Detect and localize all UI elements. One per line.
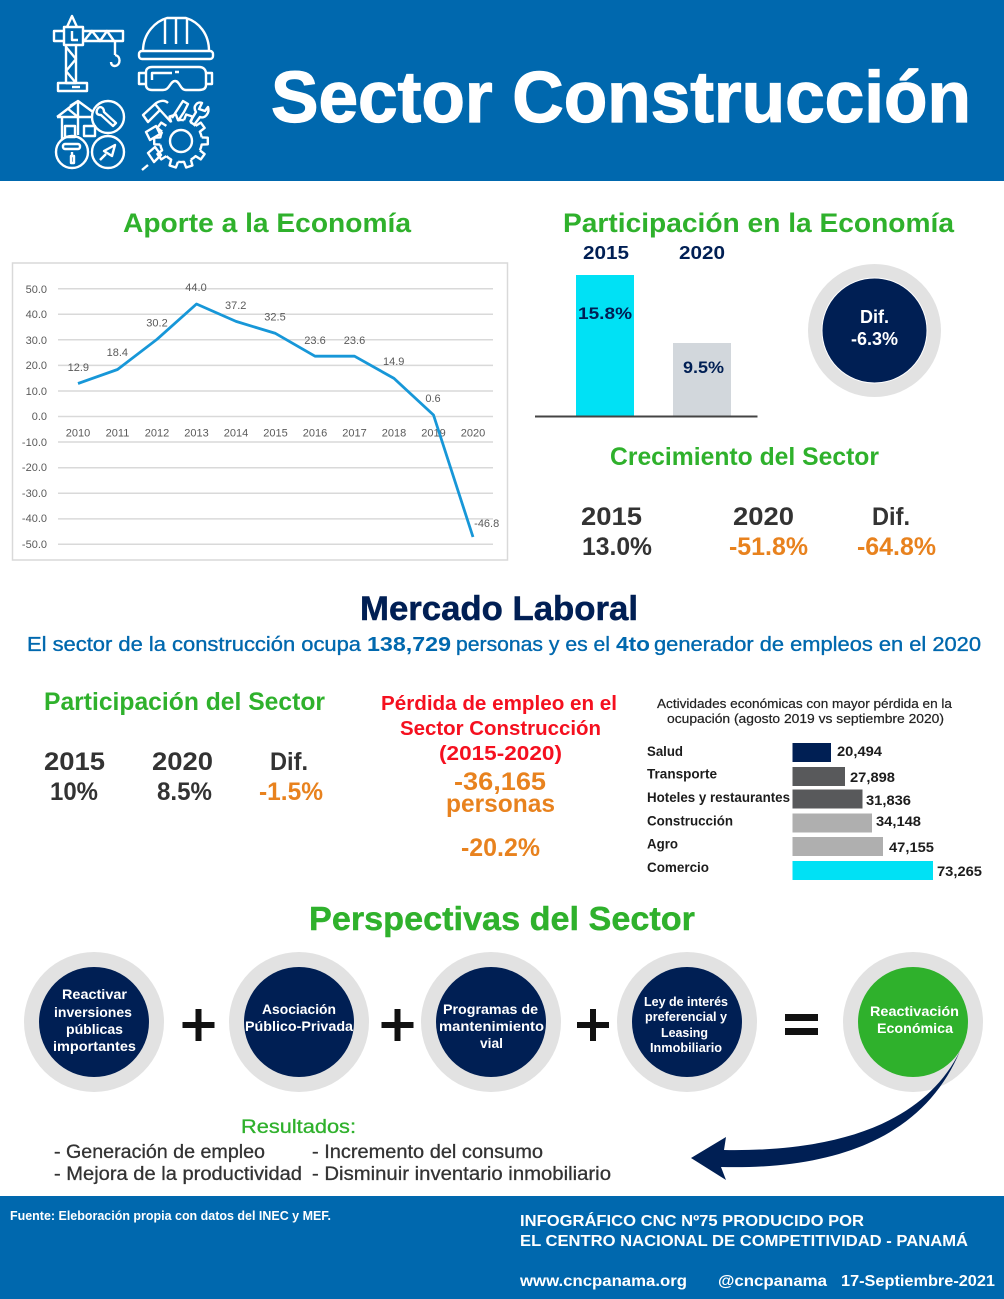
data labels: 37.2 [225,300,246,312]
panel: participación del sector: 10% [50,778,98,806]
bar chart: actividades económicas: 73,265 [937,864,983,879]
heading: perspectivas del sector: Perspectivas del Sector [309,900,695,937]
data labels: 12.9 [68,362,89,374]
data line [78,304,473,537]
results block: - Mejora de la productividad [54,1164,302,1185]
plus sign [577,1009,609,1041]
panel: participación del sector: Dif. [270,748,308,776]
subtitle: empleo [27,634,981,656]
gridlines and y axis: 10.0 [26,386,47,398]
circle: reactivar inversiones: importantes [53,1038,136,1054]
bar chart: actividades económicas: ocupación (agosto 2019 vs septiembre 2020) [667,712,944,726]
gridlines and y axis: 40.0 [26,309,47,321]
bar chart: actividades económicas: 47,155 [889,840,935,855]
panel: participación del sector: -1.5% [259,778,323,806]
panel: participación del sector: 8.5% [157,778,212,806]
bar chart: actividades económicas: Salud [647,744,683,759]
data labels [68,282,499,530]
year labels: 2016 [303,428,327,440]
panel: participación del sector [44,688,325,806]
results block [54,1117,611,1185]
year labels [66,428,485,440]
gridlines and y axis: 30.0 [26,335,47,347]
circle: ley de interés: preferencial y [645,1010,727,1024]
bar chart: actividades económicas: Construcción [647,814,733,828]
subtitle: empleo: El sector de la construcción ocupa [27,634,362,656]
panel: pérdida de empleo [381,693,617,862]
gridlines and y axis: 0.0 [32,411,47,423]
panel: pérdida de empleo: Sector Construcción [400,718,601,740]
circle: reactivar inversiones [24,952,164,1092]
footer: Fuente: Eleboración propia con datos del INEC y MEF. [10,1208,331,1223]
equals sign [785,1014,818,1035]
year labels: 2018 [382,428,406,440]
panel: participación del sector: 2020 [152,748,213,776]
bar chart: participación: 9.5% [683,358,724,377]
gridlines and y axis [22,284,493,551]
circle: programas de mantenimiento: vial [480,1035,503,1051]
subtitle: empleo: 4to [616,634,650,656]
icon: helmet and goggles [139,18,213,90]
footer: EL CENTRO NACIONAL DE COMPETITIVIDAD - PANAMÁ [520,1231,968,1250]
circle: reactivar inversiones: inversiones [54,1004,132,1020]
data labels: 18.4 [107,347,128,359]
circle: programas de mantenimiento: Programas de [443,1001,538,1017]
data labels: 30.2 [146,318,168,330]
year labels: 2011 [106,428,129,440]
heading: mercado laboral: Mercado Laboral [360,590,638,628]
footer: www.cncpanama.org [519,1273,687,1290]
bar chart: participación: 2015 [583,243,629,263]
callout: diferencia: Dif. [860,307,889,327]
year labels: 2014 [224,428,248,440]
stats: crecimiento: 13.0% [582,533,652,561]
subtitle: empleo: generador de empleos en el 2020 [654,634,981,656]
panel: pérdida de empleo: personas [446,790,555,818]
year labels: 2017 [342,428,367,440]
bar chart: actividades económicas: Comercio [647,860,709,875]
data labels: -46.8 [474,518,499,530]
results block: Resultados: [241,1117,356,1138]
gridlines and y axis: -50.0 [22,539,47,551]
footer: INFOGRÁFICO CNC Nº75 PRODUCIDO POR [520,1211,864,1230]
circle: ley de interés [617,952,757,1092]
circle: reactivación económica: Reactivación [870,1003,959,1019]
circle: ley de interés: Inmobiliario [650,1041,722,1055]
panel: participación del sector: 2015 [44,748,105,776]
header banner [0,0,1004,181]
footer [0,1196,1004,1299]
bar chart: actividades económicas: Transporte [647,766,717,782]
panel: pérdida de empleo: -20.2% [461,834,540,862]
footer: @cncpanama [718,1273,827,1290]
bar chart: actividades económicas: Hoteles y restaurantes [647,790,790,805]
circle: ley de interés: Ley de interés [644,995,728,1009]
circle: reactivación económica [843,952,983,1092]
icon: crane [54,16,123,91]
plus sign [382,1009,414,1041]
gridlines and y axis: -30.0 [22,488,47,500]
circle: reactivación económica: Económica [877,1020,953,1036]
panel: pérdida de empleo: (2015-2020) [439,743,562,765]
gridlines and y axis: 50.0 [26,284,47,296]
results block: - Generación de empleo [54,1142,265,1163]
bar chart: actividades económicas [647,697,983,880]
stats: crecimiento: -64.8% [857,533,936,561]
circle: asociación público-privada [229,952,369,1092]
year labels: 2020 [461,428,485,440]
gridlines and y axis: 20.0 [26,360,47,372]
circle: reactivar inversiones: públicas [66,1021,123,1037]
stats: crecimiento: 2015 [581,503,642,531]
circle: asociación público-privada: Asociación [262,1001,336,1017]
stats: crecimiento [581,503,936,561]
panel: pérdida de empleo: -36,165 [454,768,546,796]
circle: asociación público-privada: Público-Privada [245,1018,353,1034]
icon: gear and tools [142,101,208,170]
footer: 17-Septiembre-2021 [841,1273,995,1290]
line chart: aporte a la economía [12,263,508,560]
heading: crecimiento del sector: Crecimiento del Sector [610,443,879,471]
plus sign [182,1009,214,1041]
icon: house with tools [56,101,124,168]
year labels: 2015 [263,428,288,440]
data labels: 32.5 [264,312,286,324]
results block: - Disminuir inventario inmobiliario [312,1164,611,1185]
callout: diferencia [808,264,941,397]
bar chart: actividades económicas: 34,148 [876,814,922,829]
bar chart: participación [535,243,758,418]
bar chart: participación: 15.8% [578,304,632,323]
bar chart: actividades económicas: 31,836 [866,793,912,808]
panel: pérdida de empleo: Pérdida de empleo en el [381,693,617,715]
circle: ley de interés: Leasing [661,1026,708,1040]
heading: aporte a la economía: Aporte a la Economía [123,208,412,238]
gridlines and y axis: -20.0 [22,462,47,474]
title: Sector Construcción [271,58,971,138]
data labels: 14.9 [383,356,404,368]
data labels: 23.6 [344,335,365,347]
bar chart: actividades económicas: 20,494 [837,744,883,759]
bar chart: actividades económicas: Agro [647,836,678,852]
heading: participación en la economía: Participación en la Economía [563,208,955,238]
callout: diferencia: -6.3% [851,329,898,349]
gridlines and y axis: -10.0 [22,437,47,449]
data labels: 23.6 [304,335,326,347]
circle: reactivar inversiones: Reactivar [62,986,128,1002]
year labels: 2013 [184,428,209,440]
bar chart: participación: 2020 [679,243,725,263]
year labels: 2012 [145,428,169,440]
bar chart: actividades económicas: Actividades económicas con mayor pérdida en la [657,697,952,711]
year labels: 2019 [421,428,446,440]
subtitle: empleo: personas y es el [456,634,610,656]
data labels: 44.0 [185,282,207,294]
results block: - Incremento del consumo [312,1142,543,1163]
bar chart: actividades económicas: 27,898 [850,770,896,785]
panel: participación del sector: Participación del Sector [44,688,325,716]
subtitle: empleo: 138,729 [367,634,451,656]
stats: crecimiento: Dif. [872,503,910,531]
arrow: curved to results [691,1051,960,1180]
stats: crecimiento: 2020 [733,503,794,531]
circle: programas de mantenimiento: mantenimiento [439,1018,544,1034]
gridlines and y axis: -40.0 [22,513,47,525]
stats: crecimiento: -51.8% [729,533,808,561]
year labels: 2010 [66,428,90,440]
data labels: 0.6 [425,393,441,405]
circle: programas de mantenimiento [421,952,561,1092]
